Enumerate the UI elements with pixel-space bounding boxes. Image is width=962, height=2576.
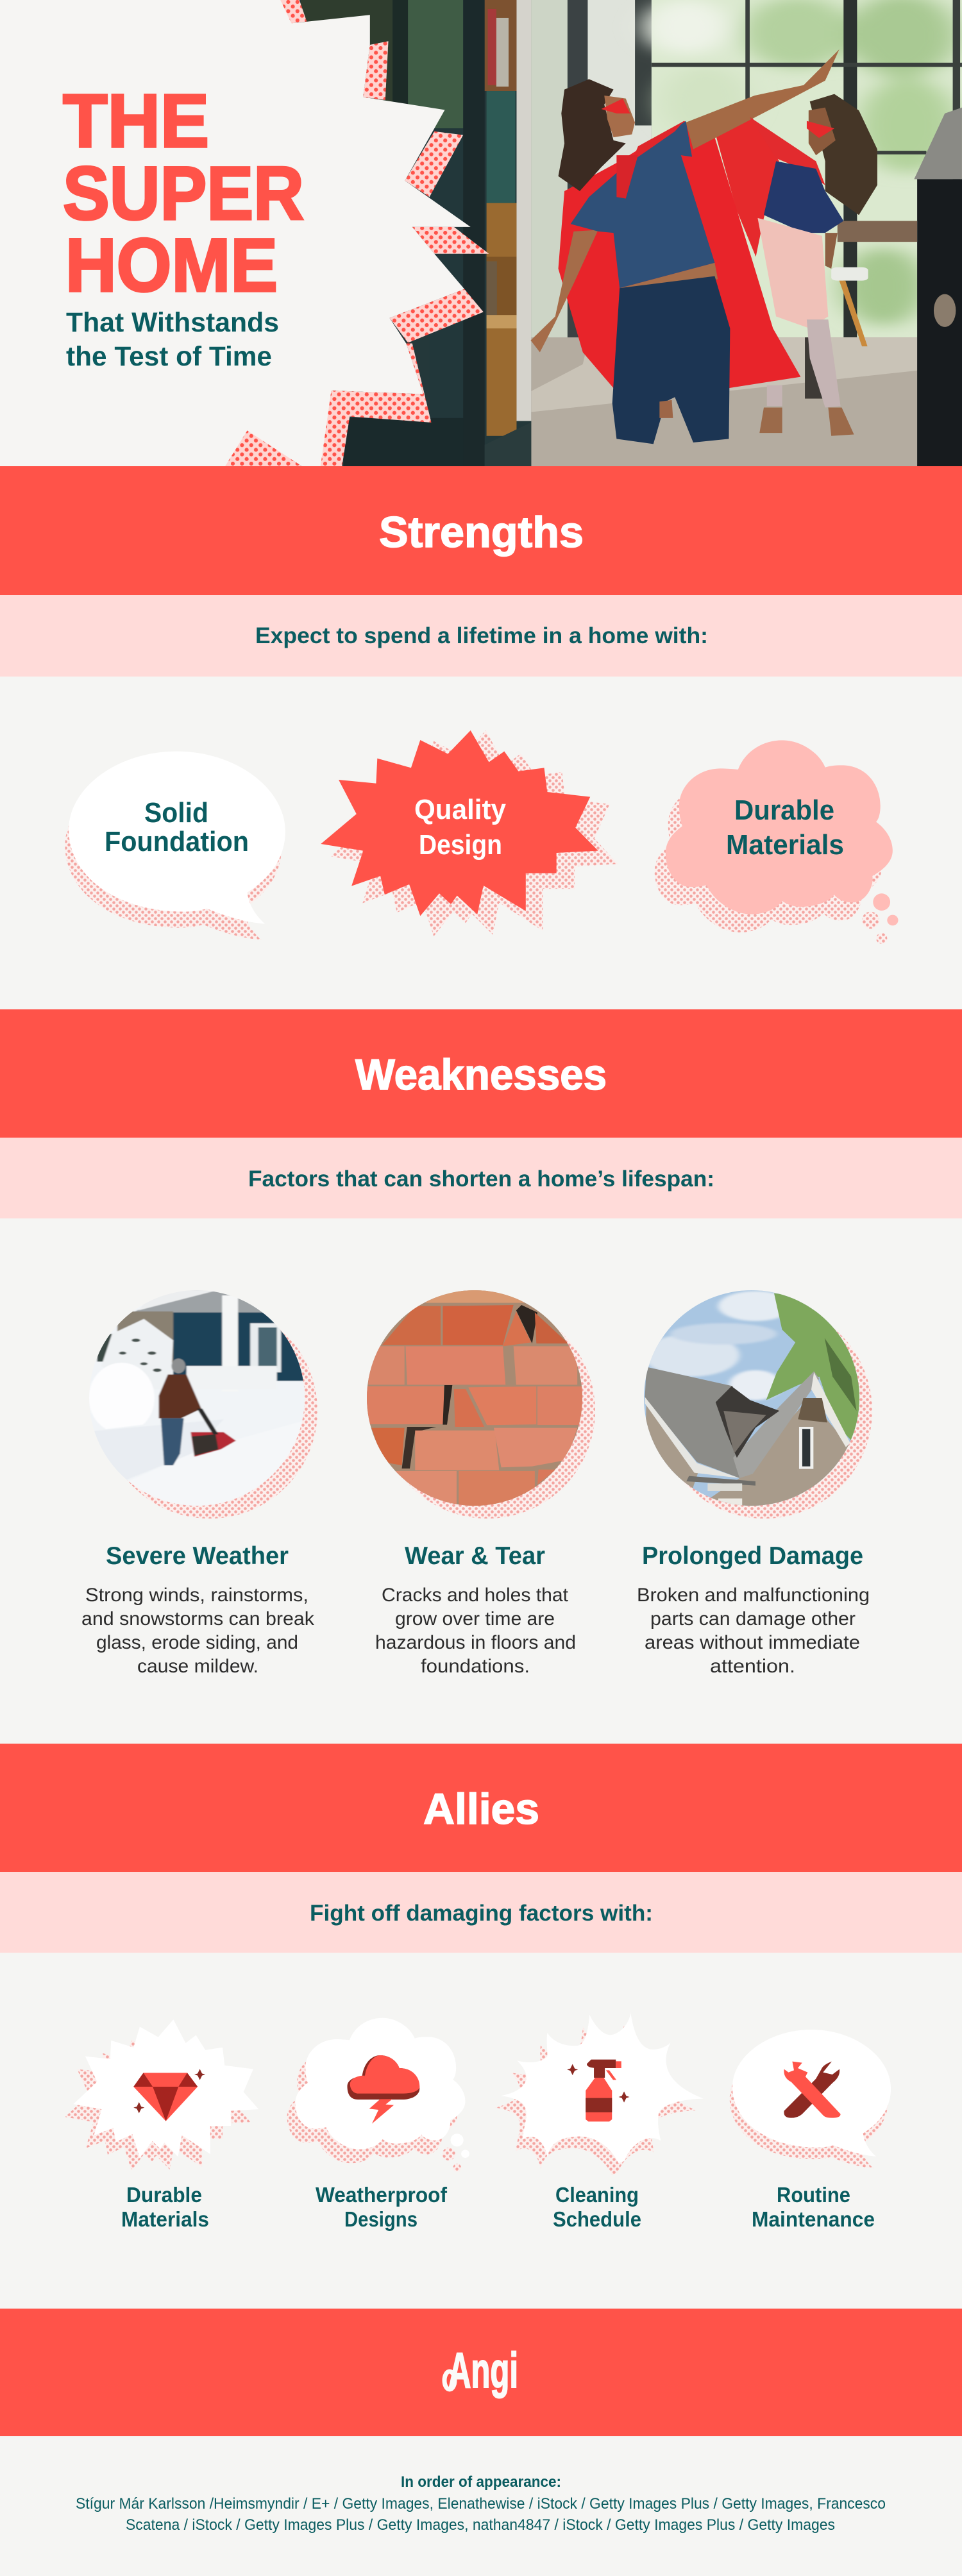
column: prolonged damage xyxy=(637,1542,870,1677)
burst shadow: cleaning schedule xyxy=(497,2026,695,2175)
label: solid foundation xyxy=(105,797,249,857)
subtitle: That Withstands xyxy=(66,307,279,338)
text: severe weather description xyxy=(81,1585,315,1677)
text: wear and tear description xyxy=(375,1585,576,1677)
speech bubble: solid foundation xyxy=(69,752,285,924)
icon: storm cloud xyxy=(347,2055,419,2124)
thought cloud shadow xyxy=(654,799,888,944)
label: quality design xyxy=(414,794,506,861)
strengths subheader band xyxy=(0,595,962,677)
logo: Angi xyxy=(444,2342,518,2398)
starburst: quality design xyxy=(321,730,598,916)
text: prolonged damage description: parts can damage other xyxy=(650,1608,856,1629)
subtitle xyxy=(66,307,279,372)
strengths header band xyxy=(0,466,962,595)
thought cloud: durable materials xyxy=(666,740,899,925)
panel: strengths xyxy=(0,466,962,949)
credits xyxy=(76,2473,886,2534)
title: HOME xyxy=(65,223,278,308)
burst: durable materials xyxy=(73,2019,258,2158)
speech bubble shadow xyxy=(65,825,281,940)
column: wear and tear xyxy=(375,1542,576,1677)
text: wear and tear description: Cracks and holes that xyxy=(382,1585,569,1606)
text: prolonged damage description: areas without immediate xyxy=(645,1632,860,1653)
footer band xyxy=(0,2309,962,2436)
label: durable materials xyxy=(726,795,844,861)
heading: severe weather: Severe Weather xyxy=(106,1542,289,1570)
hero panel xyxy=(225,0,962,466)
credits: Scatena / iStock / Getty Images Plus / Getty Images, nathan4847 / iStock / Getty Images Plus / Getty Images xyxy=(126,2516,835,2534)
burst shadow: durable materials xyxy=(65,2041,250,2170)
subtitle: the Test of Time xyxy=(66,341,272,372)
starburst shadow xyxy=(331,730,616,936)
label: cleaning schedule xyxy=(553,2183,641,2231)
weaknesses header band xyxy=(0,1009,962,1138)
bubble: routine maintenance xyxy=(732,2030,891,2157)
photo: cracked brick wall xyxy=(362,1289,591,1509)
hero photo: mother and daughter in superhero capes xyxy=(294,0,962,469)
title xyxy=(63,79,304,308)
bubble shadow: routine maintenance xyxy=(730,2084,888,2169)
label: cleaning schedule: Cleaning xyxy=(555,2183,639,2207)
text: severe weather description: and snowstorms can break xyxy=(81,1608,315,1629)
label: weatherproof designs xyxy=(316,2183,448,2231)
text: severe weather description: glass, erode siding, and xyxy=(96,1632,298,1653)
allies subheader band xyxy=(0,1872,962,1953)
icon: crossed wrenches xyxy=(784,2062,841,2118)
cloud shadow: weatherproof designs xyxy=(287,2062,461,2171)
label: weatherproof designs: Weatherproof xyxy=(316,2183,448,2207)
burst: cleaning schedule xyxy=(501,2012,704,2163)
panel: weaknesses xyxy=(0,1009,962,1677)
label: durable materials: Durable xyxy=(126,2183,202,2207)
label: durable materials: Materials xyxy=(121,2207,209,2231)
title: THE xyxy=(63,79,209,164)
label: weatherproof designs: Designs xyxy=(344,2207,418,2231)
title: SUPER xyxy=(63,151,304,236)
text: wear and tear description: grow over time are xyxy=(395,1608,555,1629)
credits: In order of appearance: xyxy=(401,2473,561,2491)
label: routine maintenance: Routine xyxy=(777,2183,850,2207)
allies subheading: Fight off damaging factors with: xyxy=(310,1901,653,1926)
text: wear and tear description: foundations. xyxy=(421,1656,530,1677)
hero halftone accents xyxy=(218,0,494,466)
credits: Stígur Már Karlsson /Heimsmyndir / E+ / Getty Images, Elenathewise / iStock / Getty Images Plus / Getty Images, Francesco xyxy=(76,2495,886,2513)
icon: diamond xyxy=(133,2069,205,2121)
label: durable materials xyxy=(121,2183,209,2231)
strengths heading: Strengths xyxy=(379,508,584,557)
weaknesses subheading: Factors that can shorten a home’s lifespan: xyxy=(248,1166,714,1191)
text: severe weather description: Strong winds, rainstorms, xyxy=(85,1585,308,1606)
label: quality design: Design xyxy=(419,829,502,861)
icon: spray bottle xyxy=(567,2060,630,2121)
label: cleaning schedule: Schedule xyxy=(553,2207,641,2231)
label: durable materials: Durable xyxy=(734,795,834,826)
heading: wear and tear: Wear & Tear xyxy=(405,1542,545,1570)
weaknesses subheader band xyxy=(0,1138,962,1218)
column: severe weather xyxy=(81,1542,315,1677)
girl xyxy=(810,94,877,215)
label: routine maintenance xyxy=(752,2183,875,2231)
allies header band xyxy=(0,1744,962,1872)
hero burst shape xyxy=(294,15,471,466)
panel: allies xyxy=(0,1744,962,2231)
photo: storm damaged roof xyxy=(641,1289,865,1509)
text: prolonged damage description: attention. xyxy=(710,1656,795,1677)
photo shadows xyxy=(102,1303,872,1519)
text: wear and tear description: hazardous in floors and xyxy=(375,1632,576,1653)
label: durable materials: Materials xyxy=(726,829,844,861)
allies heading: Allies xyxy=(423,1785,539,1833)
label: solid foundation: Solid xyxy=(144,797,208,829)
logo: Angi: Angi xyxy=(448,2342,518,2398)
weaknesses heading: Weaknesses xyxy=(355,1050,607,1099)
strengths subheading: Expect to spend a lifetime in a home with: xyxy=(255,623,708,648)
text: prolonged damage description: Broken and malfunctioning xyxy=(637,1585,870,1606)
woman xyxy=(714,117,779,257)
label: routine maintenance: Maintenance xyxy=(752,2207,875,2231)
text: prolonged damage description xyxy=(637,1585,870,1677)
label: quality design: Quality xyxy=(414,794,506,825)
text: severe weather description: cause mildew. xyxy=(137,1656,258,1677)
label: solid foundation: Foundation xyxy=(105,826,249,857)
photo: snow blowing in front of a house xyxy=(80,1289,314,1509)
cloud: weatherproof designs xyxy=(295,2018,469,2158)
heading: prolonged damage: Prolonged Damage xyxy=(642,1542,863,1570)
